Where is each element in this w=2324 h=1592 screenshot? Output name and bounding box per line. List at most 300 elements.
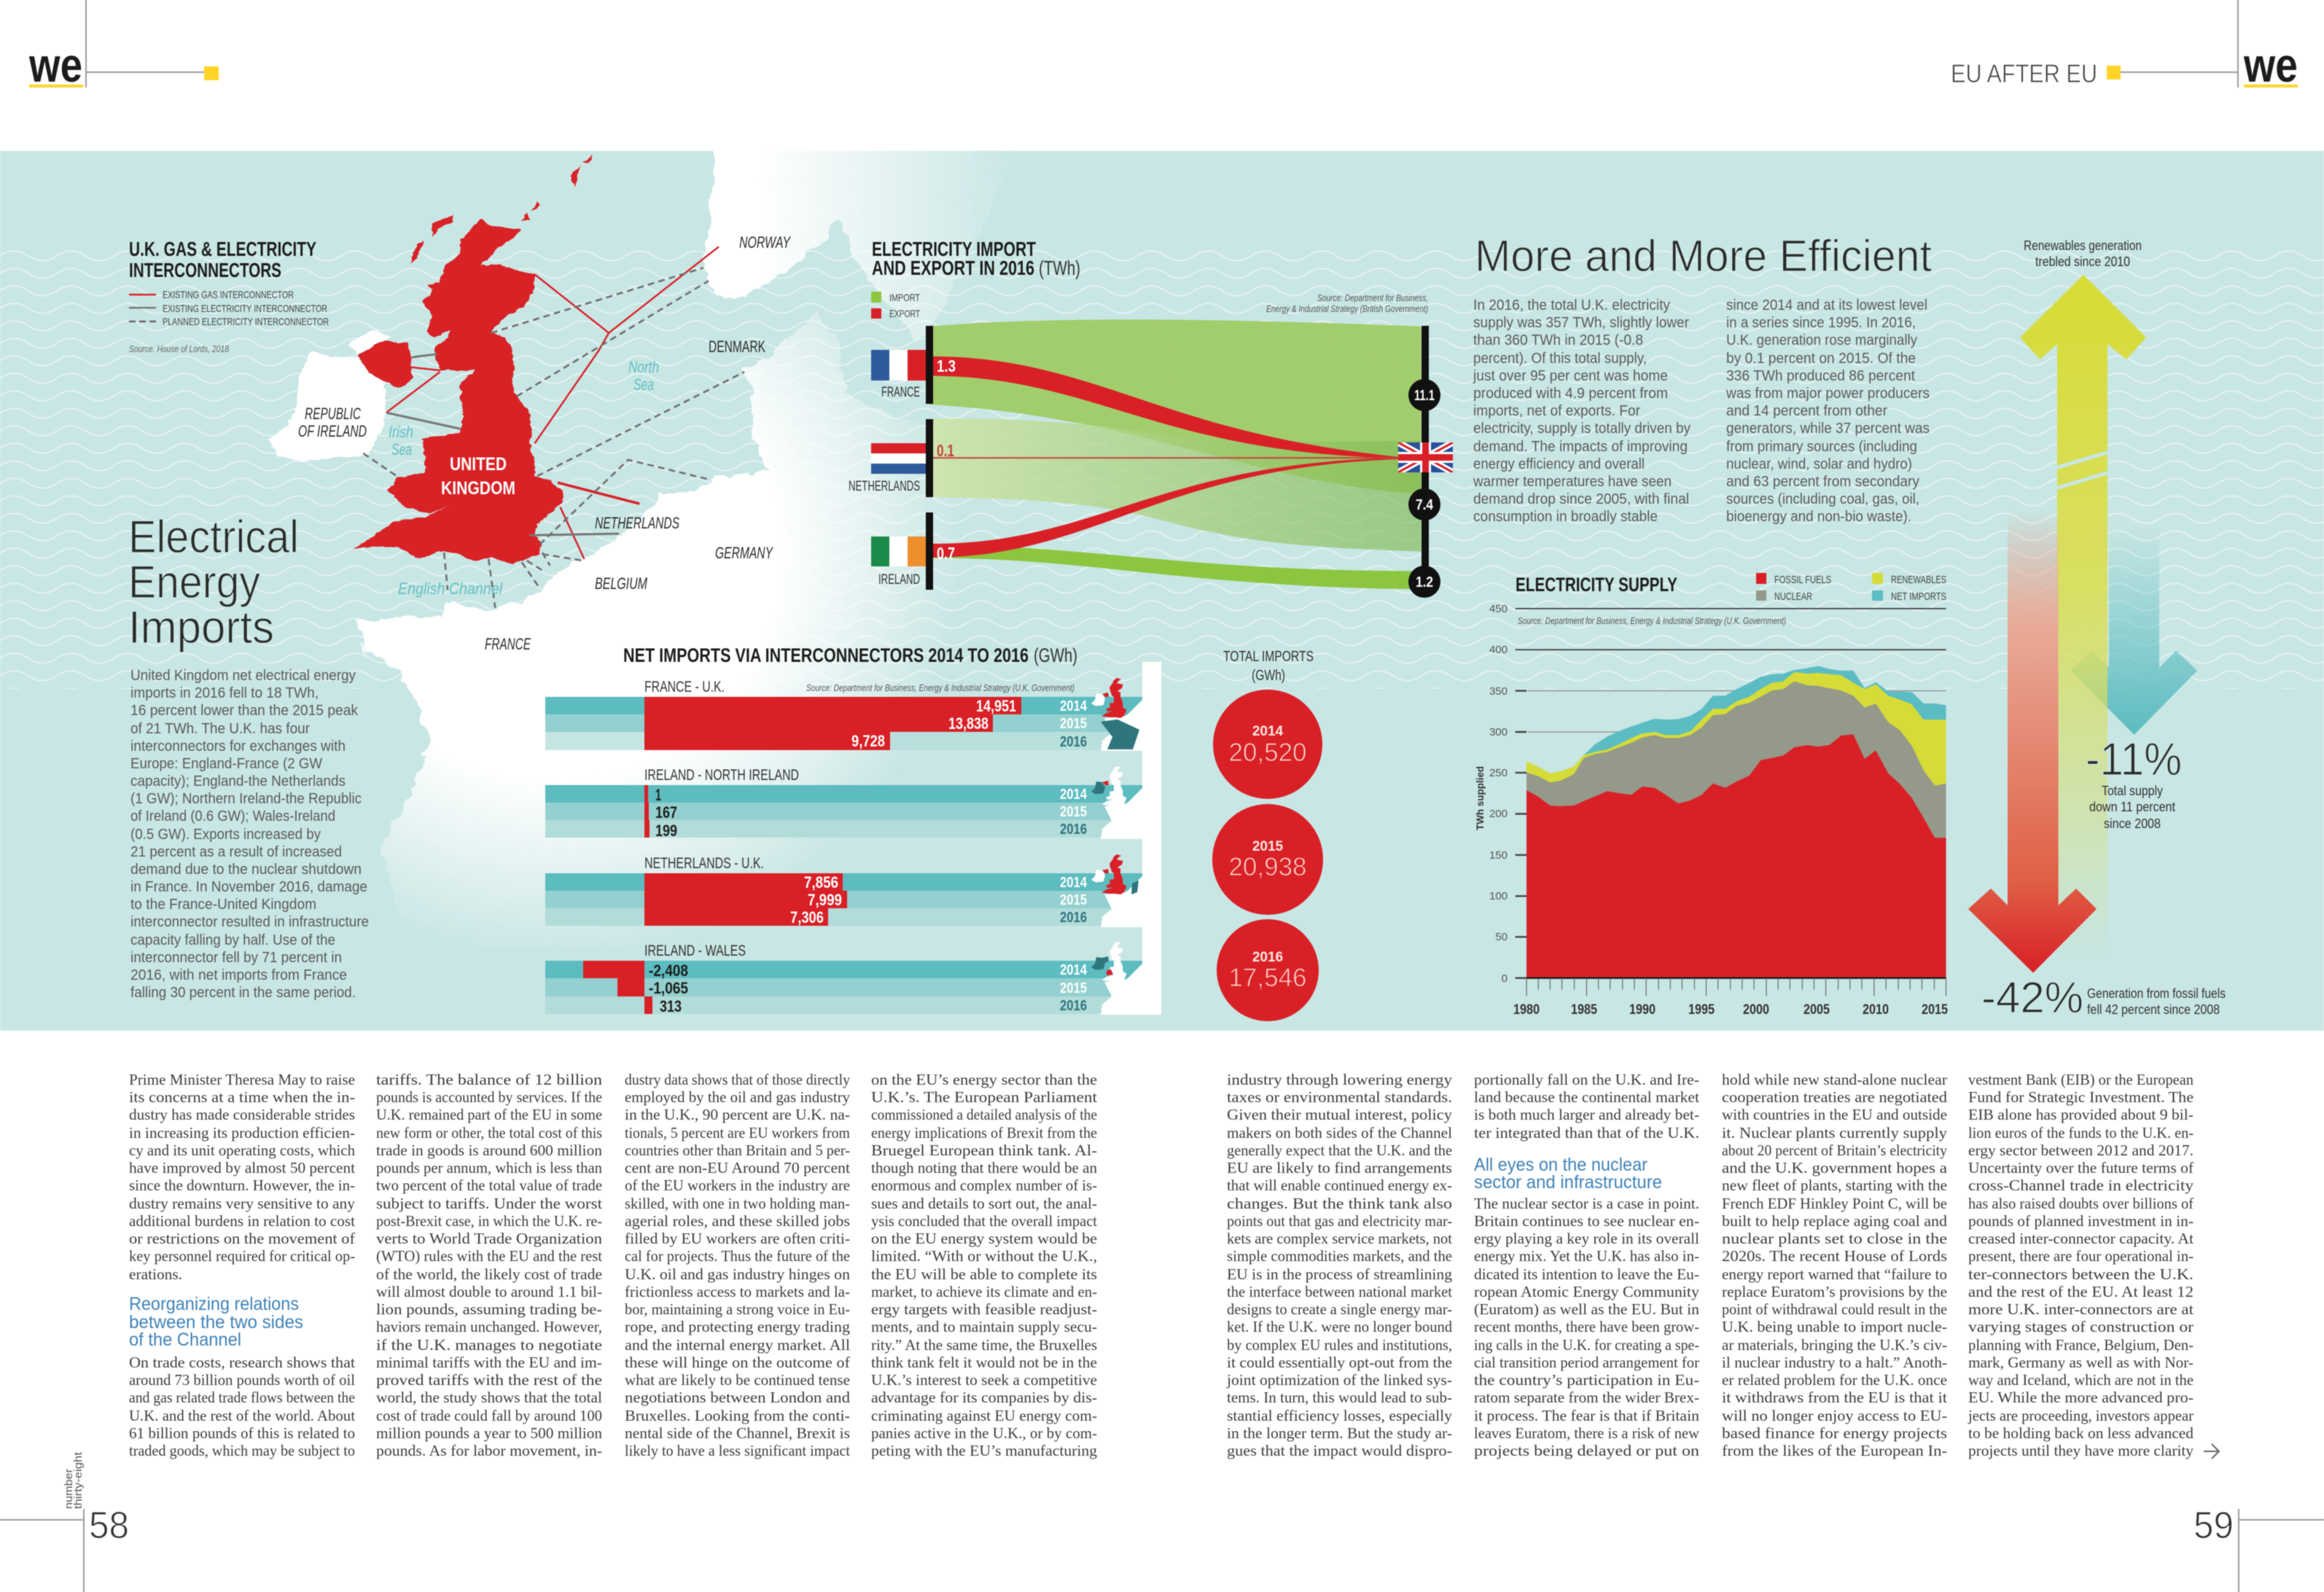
text block: efficiency column 1: electricity, supply is totally driven by <box>1473 421 1691 437</box>
article column 2: of the world, the likely cost of trade <box>376 1265 602 1283</box>
total imports heading: TOTAL IMPORTS <box>1223 649 1314 665</box>
bar values: 199 <box>655 822 677 840</box>
sankey heading: AND EXPORT IN 2016 <box>872 257 1034 279</box>
y axis labels: 0 <box>1502 972 1508 985</box>
article column 2: two percent of the total value of trade <box>376 1177 602 1194</box>
article column 1: around 73 billion pounds worth of oil <box>129 1371 355 1389</box>
article column 2: subject to tariffs. Under the worst <box>376 1195 602 1212</box>
x axis labels: 1985 <box>1571 1002 1597 1018</box>
article column 6: ter integrated than that of the U.K. <box>1474 1124 1699 1142</box>
text block: efficiency column 1: imports, net of exports. For <box>1473 403 1640 419</box>
y axis labels: 100 <box>1489 890 1508 902</box>
supply legend: NUCLEAR <box>1774 590 1812 603</box>
article column 4: ergy targets with feasible readjust- <box>871 1300 1097 1318</box>
article column 4: U.K.’s. The European Parliament <box>871 1088 1097 1106</box>
article column 4: market, to achieve its climate and en- <box>871 1283 1097 1300</box>
article column 6 <box>1474 1071 1700 1459</box>
supply legend: RENEWABLES <box>1891 574 1946 586</box>
article column 5: makers on both sides of the Channel <box>1227 1124 1452 1142</box>
article column 6: (Euratom) as well as the EU. But in <box>1474 1300 1700 1318</box>
total imports circles <box>1212 649 1323 1021</box>
text block: efficiency column 1: just over 95 per cent was home <box>1473 368 1668 384</box>
article column 7: about 20 percent of Britain’s electricity <box>1722 1142 1947 1159</box>
bar values: 7,306 <box>790 908 824 926</box>
country labels: IRELAND <box>878 572 920 588</box>
y axis title: TWh supplied <box>1474 766 1486 830</box>
article column 1: have improved by almost 50 percent <box>129 1159 355 1177</box>
text block: efficiency column 2: in a series since 1995. In 2016, <box>1726 315 1916 331</box>
subheading: reorganizing relations: between the two sides <box>129 1312 303 1332</box>
text block: electrical energy imports intro: (1 GW); Northern Ireland-the Republic <box>130 791 362 807</box>
article column 6: is both much larger and already bet- <box>1474 1106 1699 1123</box>
text block: efficiency column 2: was from major power producers <box>1726 386 1930 402</box>
article column 2: U.K. remained part of the EU in some <box>376 1106 602 1123</box>
map: UK and Ireland with interconnectors <box>268 155 744 608</box>
article column 7: based finance for energy projects <box>1722 1424 1947 1442</box>
title: Electrical Energy Imports: Electrical <box>128 512 299 563</box>
text block: efficiency column 1: In 2016, the total U.K. electricity <box>1473 297 1670 313</box>
text block: efficiency column 2: since 2014 and at its lowest level <box>1726 297 1927 313</box>
article column 6: recent months, there have been grow- <box>1474 1318 1699 1335</box>
article column 1: U.K. and the rest of the world. About <box>129 1407 355 1424</box>
title: Electrical Energy Imports <box>128 512 299 653</box>
total imports heading: (GWh) <box>1252 668 1285 684</box>
year labels: 2015 <box>1060 804 1087 820</box>
x axis labels: 2010 <box>1863 1002 1889 1018</box>
article column 5: EU are likely to find arrangements <box>1227 1159 1452 1177</box>
year labels: 2016 <box>1060 822 1087 838</box>
article column 3: U.K. oil and gas industry hinges on <box>625 1265 851 1283</box>
section labels <box>644 679 799 959</box>
article column 6: projects being delayed or put on <box>1474 1442 1700 1459</box>
circle 2016 <box>1217 919 1319 1021</box>
article column 8: vestment Bank (EIB) or the European <box>1968 1071 2194 1088</box>
article column 1: and gas related trade flows between the <box>129 1389 355 1406</box>
title: Electrical Energy Imports: Imports <box>128 602 274 653</box>
text block: electrical energy imports intro: in France. In November 2016, damage <box>130 879 367 895</box>
y axis labels: 150 <box>1489 849 1508 862</box>
y axis labels: 50 <box>1495 931 1508 943</box>
article column 8: lion euros of the funds to the U.K. en- <box>1968 1124 2194 1142</box>
text block: electrical energy imports intro: capacity falling by half. Use of the <box>130 932 335 948</box>
article column 5: generally expect that the U.K. and the <box>1227 1142 1452 1159</box>
panel: infographic background <box>0 151 2324 1031</box>
year labels: 2015 <box>1060 716 1087 732</box>
article column 8: EU. While the more advanced pro- <box>1968 1389 2194 1406</box>
bar values: 167 <box>655 803 677 822</box>
article column 4: peting with the EU’s manufacturing <box>871 1442 1098 1459</box>
country labels <box>849 385 920 588</box>
article column 4: panies active in the U.K., or by com- <box>871 1424 1097 1442</box>
bar values: 13,838 <box>948 714 989 733</box>
article column 7 <box>1722 1071 1948 1459</box>
subheading: all eyes on the nuclear sector: All eyes on the nuclear <box>1474 1155 1648 1175</box>
article column 2: world, the study shows that the total <box>376 1389 602 1406</box>
article column 1: its concerns at a time when the in- <box>129 1088 355 1106</box>
text block: electrical energy imports intro: United Kingdom net electrical energy <box>130 668 356 684</box>
import values <box>1408 379 1440 598</box>
article column 2: lion pounds, assuming trading be- <box>376 1300 602 1318</box>
x axis labels: 1980 <box>1513 1002 1540 1018</box>
year labels: 2014 <box>1060 875 1088 891</box>
subheading: reorganizing relations: of the Channel <box>129 1330 241 1350</box>
text block: electrical energy imports intro: imports in 2016 fell to 18 TWh, <box>130 685 319 701</box>
y axis labels: 300 <box>1489 726 1508 738</box>
article column 8: to be holding back on less advanced <box>1968 1424 2194 1442</box>
circle 2014 <box>1213 690 1322 799</box>
text block: efficiency column 2: nuclear, wind, solar and hydro) <box>1726 456 1912 472</box>
title: Electrical Energy Imports: Energy <box>128 557 260 608</box>
circle 2016: 17,546 <box>1228 964 1307 992</box>
chart: electricity import and export sankey <box>849 238 1453 598</box>
section labels: NETHERLANDS - U.K. <box>644 855 764 872</box>
text block: efficiency column 1: percent). Of this total supply, <box>1473 351 1647 367</box>
year labels: 2016 <box>1060 998 1087 1014</box>
article column 5: stantial efficiency losses, especially <box>1227 1407 1453 1424</box>
import values: 1.2 <box>1416 574 1433 590</box>
article column 7: built to help replace aging coal and <box>1722 1212 1948 1230</box>
callout: renewables trebled: Renewables generation <box>2024 238 2142 253</box>
planned electricity interconnectors <box>363 268 744 608</box>
callout: fossil fuels down 42 percent: fell 42 percent since 2008 <box>2087 1002 2220 1017</box>
bar values: 1 <box>655 786 661 804</box>
article column 1: key personnel required for critical op- <box>129 1247 355 1265</box>
circle 2014: 20,520 <box>1228 738 1307 767</box>
article column 8: and the rest of the EU. At least 12 <box>1968 1283 2194 1300</box>
article column 4: enormous and complex number of is- <box>871 1177 1097 1194</box>
row bands <box>545 697 1142 1014</box>
article column 7: French EDF Hinkley Point C, will be <box>1722 1195 1947 1212</box>
article column 8: cross-Channel trade in electricity <box>1968 1177 2194 1194</box>
article column 3: countries other than Britain and 5 per- <box>625 1142 850 1159</box>
text block: efficiency column 1: consumption in broadly stable <box>1473 509 1658 525</box>
header right: section title and logo <box>1951 0 2298 92</box>
x axis labels: 2015 <box>1922 1002 1948 1018</box>
article column 7: new fleet of plants, starting with the <box>1722 1177 1947 1194</box>
article column 3 <box>625 1071 851 1459</box>
y axis labels: 450 <box>1489 603 1508 615</box>
heading: U.K. gas and electricity interconnectors: U.K. GAS & ELECTRICITY <box>129 238 316 260</box>
article column 6: it process. The fear is that if Britain <box>1474 1407 1700 1424</box>
text block: efficiency column 1: energy efficiency and overall <box>1473 456 1645 472</box>
article column 8: varying stages of construction or <box>1968 1318 2194 1335</box>
section labels: IRELAND - WALES <box>644 943 746 959</box>
area: renewables <box>1526 672 1946 978</box>
mini map: Ireland - North Ireland <box>1091 750 1161 839</box>
footer left: issue label and page number: thirty-eight <box>72 1451 85 1509</box>
legend: interconnector types: EXISTING GAS INTERCONNECTOR <box>163 289 294 300</box>
article column 1: or restrictions on the movement of <box>129 1230 355 1247</box>
article column 2: million pounds a year to 500 million <box>376 1424 602 1442</box>
sankey legend: IMPORT <box>889 292 920 303</box>
text block: electrical energy imports intro: 2016, with net imports from France <box>130 967 347 983</box>
year labels <box>1060 698 1088 1014</box>
article column 7: with countries in the EU and outside <box>1722 1106 1947 1123</box>
article column 1: cy and its unit operating costs, which <box>129 1142 355 1159</box>
subheading: reorganizing relations: Reorganizing relations <box>129 1294 299 1314</box>
sankey source <box>1266 292 1428 314</box>
article column 8 <box>1968 1071 2194 1459</box>
article column 5: points out that gas and electricity mar- <box>1227 1212 1452 1230</box>
text block: electrical energy imports intro: to the France-United Kingdom <box>130 897 316 913</box>
article column 4: criminating against EU energy com- <box>871 1407 1097 1424</box>
y axis labels: 400 <box>1489 644 1508 656</box>
year labels: 2015 <box>1060 892 1087 908</box>
text block: electrical energy imports intro: 21 percent as a result of increased <box>130 844 342 860</box>
map: place labels: NETHERLANDS <box>595 514 679 532</box>
article column 1 <box>129 1071 356 1459</box>
article column 7: hold while new stand-alone nuclear <box>1722 1071 1947 1088</box>
export values: 0.1 <box>937 441 954 460</box>
flag: France <box>871 350 926 381</box>
article column 5: taxes or environmental standards. <box>1227 1088 1452 1106</box>
article column 5: it could essentially opt-out from the <box>1227 1354 1452 1371</box>
article column 7: 2020s. The recent House of Lords <box>1722 1247 1947 1265</box>
map: place labels: UNITED <box>450 454 507 475</box>
article column 1: erations. <box>129 1265 182 1283</box>
article column 6: leaves Euratom, there is a risk of new <box>1474 1424 1700 1442</box>
text block: efficiency column 1 <box>1473 297 1691 525</box>
year labels: 2016 <box>1060 910 1087 926</box>
year labels: 2016 <box>1060 734 1087 750</box>
map: place labels: Irish <box>389 423 413 441</box>
text block: electrical energy imports intro: interconnectors for exchanges with <box>130 738 346 754</box>
article column 8: planning with France, Belgium, Den- <box>1968 1336 2194 1354</box>
article column 4: energy implications of Brexit from the <box>871 1124 1097 1142</box>
article column 2: pounds. As for labor movement, in- <box>376 1442 602 1459</box>
article column 8: creased inter-connector capacity. At <box>1968 1230 2194 1247</box>
article column 3: what are likely to be continued tense <box>625 1371 850 1389</box>
article column 2: minimal tariffs with the EU and im- <box>376 1354 602 1371</box>
x axis labels: 1995 <box>1688 1002 1715 1018</box>
map: place labels: REPUBLIC <box>305 405 361 423</box>
article column 2: post-Brexit case, in which the U.K. re- <box>376 1212 602 1230</box>
text block: efficiency column 2: bioenergy and non-bio waste). <box>1726 509 1911 525</box>
circle 2015: 2015 <box>1252 839 1284 854</box>
article column 8: jects are proceeding, investors appear <box>1968 1407 2194 1424</box>
article column 8: ergy sector between 2012 and 2017. <box>1968 1142 2194 1159</box>
mini map: France - U.K. <box>1091 662 1161 751</box>
article column 5: ket. If the U.K. were no longer bound <box>1227 1318 1452 1335</box>
article column 4: though noting that there would be an <box>871 1159 1097 1177</box>
article column 2: verts to World Trade Organization <box>376 1230 603 1247</box>
article column 5: in the longer term. But the study ar- <box>1227 1424 1452 1442</box>
net imports source: Source: Department for Business, Energy & Industrial Strategy (U.K. Government) <box>806 682 1075 693</box>
bar values: -2,408 <box>649 961 688 980</box>
bar values: -1,065 <box>649 979 688 997</box>
map: land masses <box>358 146 1093 948</box>
text block: efficiency column 1: produced with 4.9 percent from <box>1473 386 1668 402</box>
subheading: all eyes on the nuclear sector: sector and infrastructure <box>1474 1172 1662 1193</box>
legend: interconnector types: EXISTING ELECTRICITY INTERCONNECTOR <box>163 303 327 314</box>
sankey legend: EXPORT <box>889 308 920 319</box>
map: place labels: North <box>628 358 659 376</box>
article column 2: will almost double to around 1.1 bil- <box>376 1283 602 1300</box>
article column 6: energy mix. Yet the U.K. has also in- <box>1474 1247 1699 1265</box>
article column 5: changes. But the think tank also <box>1227 1195 1452 1212</box>
article column 8: ter-connectors between the U.K. <box>1968 1265 2194 1283</box>
supply legend <box>1756 573 1946 603</box>
article column 7: will no longer enjoy access to EU- <box>1722 1407 1947 1424</box>
article column 8: Fund for Strategic Investment. The <box>1968 1088 2194 1106</box>
map: place labels <box>298 233 791 653</box>
article column 2: if the U.K. manages to negotiate <box>376 1336 602 1354</box>
text block: electrical energy imports intro: (0.5 GW). Exports increased by <box>130 827 321 843</box>
header right: section title and logo: we <box>2243 38 2298 92</box>
supply heading: ELECTRICITY SUPPLY <box>1516 574 1677 596</box>
article column 3: these will hinge on the outcome of <box>625 1354 850 1371</box>
area: nuclear <box>1526 682 1946 978</box>
bar values <box>649 697 1016 1015</box>
article column 3: tionals, 5 percent are EU workers from <box>625 1124 850 1142</box>
sankey source: Energy & Industrial Strategy (British Government) <box>1266 303 1428 314</box>
bar values: 7,856 <box>804 873 838 891</box>
article column 4: U.K.’s interest to seek a competitive <box>871 1371 1097 1389</box>
text block: efficiency column 1: demand. The impacts of improving <box>1473 439 1688 455</box>
x axis labels: 1990 <box>1629 1002 1656 1018</box>
text block: electrical energy imports intro <box>130 668 369 1001</box>
map: place labels: BELGIUM <box>595 574 647 593</box>
article column 6: ratom separate from the wider Brex- <box>1474 1389 1699 1406</box>
footer left: issue label and page number <box>0 1451 129 1592</box>
article column 4: sues and details to sort out, the anal- <box>871 1195 1097 1212</box>
sankey flows <box>929 319 1422 589</box>
article column 5: Given their mutual interest, policy <box>1227 1106 1453 1123</box>
text block: efficiency column 2: sources (including coal, gas, oil, <box>1726 491 1919 507</box>
article column 3: agerial roles, and these skilled jobs <box>625 1212 850 1230</box>
flag: Netherlands <box>871 443 926 474</box>
header left: logo and rule: we <box>28 38 82 92</box>
article column 5: gues that the impact would dispro- <box>1227 1442 1452 1459</box>
mini map: Ireland - Wales <box>1091 926 1161 1015</box>
y axis labels: 200 <box>1489 808 1508 820</box>
callout: fossil fuels down 42 percent: Generation from fossil fuels <box>2087 986 2226 1001</box>
legend: interconnector types: PLANNED ELECTRICITY INTERCONNECTOR <box>163 316 329 327</box>
red bars <box>583 697 1021 1014</box>
article column 5: kets are complex service markets, not <box>1227 1230 1452 1247</box>
import values: 11.1 <box>1414 388 1435 404</box>
article column 8: way and Iceland, which are not in the <box>1968 1371 2194 1389</box>
article column 1: On trade costs, research shows that <box>129 1354 355 1371</box>
article column 8: EIB alone has provided about 9 bil- <box>1968 1106 2194 1123</box>
article column 7: point of withdrawal could result in the <box>1722 1300 1947 1318</box>
y axis labels: 250 <box>1489 767 1508 779</box>
article column 7: it. Nuclear plants currently supply <box>1722 1124 1948 1142</box>
header left: logo and rule <box>28 0 219 92</box>
article column 3: filled by EU workers are often criti- <box>625 1230 850 1247</box>
year labels: 2014 <box>1060 787 1088 803</box>
article column 5: tems. In turn, this would lead to sub- <box>1227 1389 1452 1406</box>
article column 6: ergy playing a key role in its overall <box>1474 1230 1699 1247</box>
text block: efficiency column 2: generators, while 37 percent was <box>1726 421 1930 437</box>
callout: total supply down 11 percent: since 2008 <box>2104 816 2161 831</box>
article column 4: on the EU’s energy sector than the <box>871 1071 1097 1088</box>
text block: electrical energy imports intro: 16 percent lower than the 2015 peak <box>130 703 359 719</box>
article column 2: proved tariffs with the rest of the <box>376 1371 602 1389</box>
map: place labels: GERMANY <box>715 544 773 562</box>
article column 8: mark, Germany as well as with Nor- <box>1968 1354 2194 1371</box>
text block: electrical energy imports intro: capacity); England-the Netherlands <box>130 773 346 789</box>
text block: efficiency column 2: by 0.1 percent on 2015. Of the <box>1726 351 1916 367</box>
text block: efficiency column 1: supply was 357 TWh, slightly lower <box>1473 315 1689 331</box>
map: place labels: Sea <box>633 375 654 394</box>
article column 7: U.K. being unable to import nucle- <box>1722 1318 1947 1335</box>
text block: electrical energy imports intro: of 21 TWh. The U.K. has four <box>130 721 310 737</box>
Republic of Ireland <box>268 329 391 461</box>
article column 1: Prime Minister Theresa May to raise <box>129 1071 355 1088</box>
map: place labels: KINGDOM <box>441 478 515 499</box>
article column 1: traded goods, which may be subject to <box>129 1442 355 1459</box>
article column 5: the interface between national market <box>1227 1283 1452 1300</box>
heading: U.K. gas and electricity interconnectors <box>129 238 316 281</box>
gridlines and ticks <box>1516 609 1946 996</box>
bar values: 7,999 <box>808 891 842 909</box>
article column 3: and the internal energy market. All <box>625 1336 850 1354</box>
article column 4: Bruegel European think tank. Al- <box>871 1142 1097 1159</box>
article column 2: haviors remain unchanged. However, <box>376 1318 602 1335</box>
article column 4: on the EU energy system would be <box>871 1230 1097 1247</box>
article column 1: dustry has made considerable strides <box>129 1106 355 1123</box>
article column 7: cooperation treaties are negotiated <box>1722 1088 1948 1106</box>
article column 3: negotiations between London and <box>625 1389 851 1406</box>
article column 4: ments, and to maintain supply secu- <box>871 1318 1097 1335</box>
text block: efficiency column 2 <box>1726 297 1930 525</box>
circle 2015 <box>1212 804 1323 915</box>
article column 3: of the EU workers in the industry are <box>625 1177 850 1194</box>
article column 8: Uncertainty over the future terms of <box>1968 1159 2194 1177</box>
bar values: 14,951 <box>976 697 1016 715</box>
text block: electrical energy imports intro: Europe: England-France (2 GW <box>130 756 322 772</box>
x axis labels: 2000 <box>1743 1002 1769 1018</box>
footer right: page number: 59 <box>2194 1505 2234 1547</box>
article column 5: joint optimization of the linked sys- <box>1226 1371 1452 1389</box>
article column 6: portionally fall on the U.K. and Ire- <box>1474 1071 1699 1088</box>
article column 7: nuclear plants set to close in the <box>1722 1230 1947 1247</box>
article column 1: 61 billion pounds of this is related to <box>129 1424 355 1442</box>
article column 8: present, there are four operational in- <box>1968 1247 2194 1265</box>
callout: renewables trebled <box>2024 238 2142 269</box>
export values: 0.7 <box>937 544 955 563</box>
supply source: Source: Department for Business, Energy & Industrial Strategy (U.K. Government) <box>1518 615 1786 626</box>
supply legend: FOSSIL FUELS <box>1774 574 1831 586</box>
sankey legend <box>871 292 920 319</box>
article column 2: pounds is accounted by services. If the <box>376 1088 602 1106</box>
year labels: 2014 <box>1060 698 1088 714</box>
article column 6: Britain continues to see nuclear en- <box>1474 1212 1699 1230</box>
title: More and More Efficient: More and More Efficient <box>1475 231 1932 281</box>
article column 3: rope, and protecting energy trading <box>625 1318 851 1335</box>
article column 5 <box>1226 1071 1453 1459</box>
article column 6: cial transition period arrangement for <box>1474 1354 1699 1371</box>
arrow: article continues <box>2204 1444 2219 1459</box>
article column 2: tariffs. The balance of 12 billion <box>376 1071 603 1088</box>
article column 2: trade in goods is around 600 million <box>376 1142 602 1159</box>
article column 5: that will enable continued energy ex- <box>1227 1177 1452 1194</box>
article column 5: designs to create a single energy mar- <box>1227 1300 1452 1318</box>
article column 2 <box>376 1071 603 1459</box>
text block: efficiency column 2: and 14 percent from other <box>1726 403 1887 419</box>
callout: total supply down 11 percent <box>2086 734 2182 831</box>
map: place labels: Sea <box>391 440 412 459</box>
chart: net imports via interconnectors <box>545 644 1161 1015</box>
article column 5: EU is in the process of streamlining <box>1227 1265 1453 1283</box>
arrow: total supply down (teal) <box>2071 525 2197 735</box>
article column 2: cost of trade could fall by around 100 <box>376 1407 602 1424</box>
article column 4: rity.” At the same time, the Bruxelles <box>871 1336 1097 1354</box>
flag: Ireland <box>871 536 926 566</box>
article column 1: additional burdens in relation to cost <box>129 1212 355 1230</box>
x axis labels: 2005 <box>1804 1002 1830 1018</box>
